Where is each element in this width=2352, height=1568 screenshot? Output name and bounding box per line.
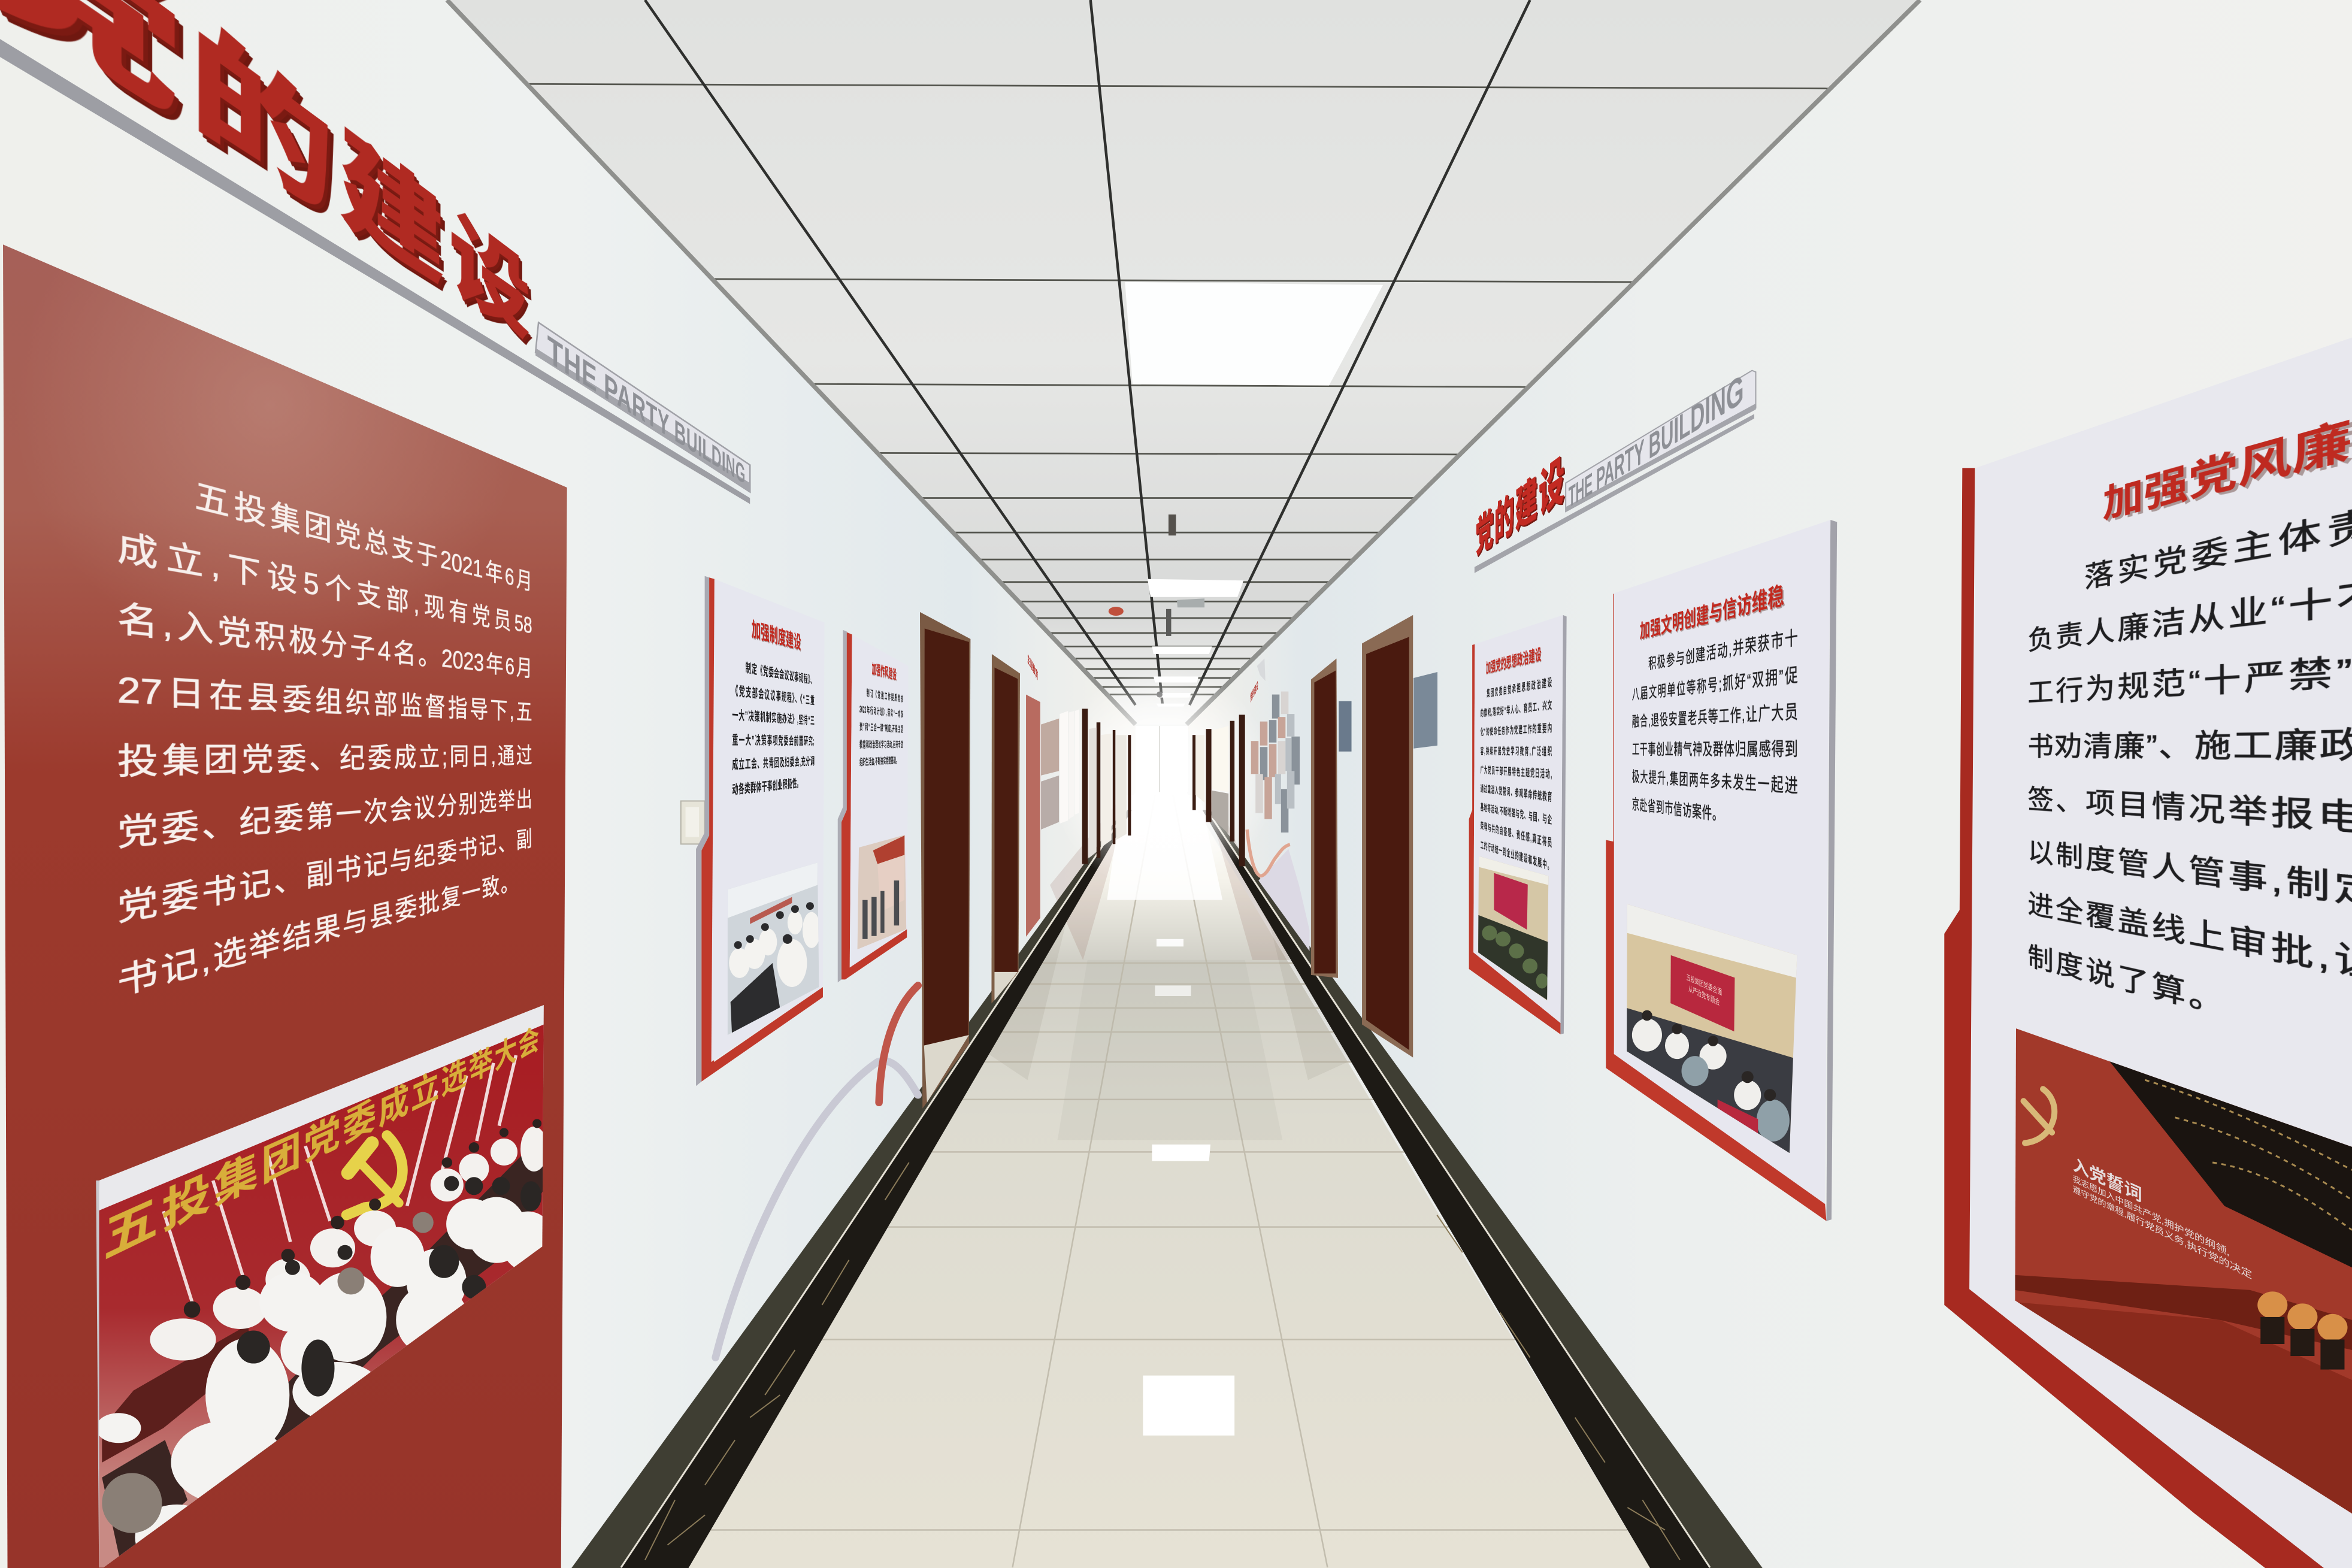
text block: political construction: 广大党员干部开展特色主题党日活动, bbox=[1481, 765, 1552, 780]
text block: civilization and petition: 工干事创业精气神及群体归属感得到 bbox=[1632, 738, 1798, 760]
text block: system building: 《党支部会议议事规程》、《“三重 bbox=[732, 683, 815, 706]
photo text: oath wall bbox=[2073, 1154, 2253, 1302]
text block: left red panel intro: 党委书记、副书记与纪委书记、副 bbox=[117, 825, 532, 928]
photo hammer and sickle bbox=[2024, 1089, 2054, 1143]
text block: political construction: 通过重温入党誓词、参观革命传统教育 bbox=[1481, 783, 1552, 803]
panel face bbox=[850, 634, 909, 967]
text block: political construction: 化”的使命任务作为党建工作的重要内 bbox=[1481, 722, 1552, 737]
text block: left red panel intro: 党委、纪委第一次会议分别选举出 bbox=[117, 786, 532, 853]
heading right: english plate: THE PARTY BUILDING bbox=[1569, 364, 1744, 514]
text block: political construction: 基地等活动,不断增强与党、与国、与企 bbox=[1481, 802, 1552, 826]
left panel photo: election meeting bbox=[90, 990, 555, 1568]
text block: political construction: 工的行动统一到企业的建设和发展中。 bbox=[1481, 840, 1552, 872]
panel face bbox=[1969, 338, 2352, 1568]
text block: system building: 制定《党委会会议议事规程》、 bbox=[746, 661, 815, 686]
baseboard right bbox=[1203, 810, 1763, 1568]
floor bbox=[689, 792, 1650, 1568]
text block: work style: 组织生活会,不断夯实党建基础。 bbox=[859, 755, 898, 767]
panel red frame bbox=[1469, 644, 1560, 1034]
text block: civilization and petition: 京赴省到市信访案件。 bbox=[1632, 796, 1723, 824]
left red panel bbox=[3, 244, 567, 1568]
heading left: english plate: THE PARTY BUILDING bbox=[547, 328, 746, 491]
strip under left heading bbox=[0, 39, 750, 504]
text block: system building: 重一大”决策事项党委会前置研究; bbox=[732, 732, 815, 747]
plate behind THE PARTY BUILDING left bbox=[535, 322, 750, 492]
text block: work style: 教育和政治理论学习活动,召开专题 bbox=[859, 739, 903, 749]
right wall bbox=[1186, 0, 2352, 1568]
panel title: political construction: 加强党的思想政治建设 bbox=[1486, 645, 1541, 676]
glow at corridor end bbox=[1050, 667, 1275, 892]
photo text: oath wall: 入党誓词 bbox=[2073, 1155, 2142, 1206]
baseboard left bbox=[571, 810, 1132, 1568]
photo text: oath wall: 我志愿加入中国共产党,拥护党的纲领, bbox=[2073, 1175, 2230, 1258]
small title far left: 主题教育 bbox=[1028, 652, 1038, 683]
text block: party conduct: 制度说了算。 bbox=[2028, 942, 2228, 1023]
panel photo bbox=[855, 833, 909, 952]
audience shirts bbox=[96, 1197, 555, 1568]
panel red frame bbox=[1944, 468, 2352, 1568]
panel: political construction bbox=[1469, 615, 1567, 1034]
text block: civilization and petition: 极大提升,集团两年多未发生一起进 bbox=[1632, 769, 1798, 797]
panel side edge bbox=[696, 576, 709, 1086]
ceiling light panel near bbox=[1125, 282, 1383, 386]
text block: system building: 动各类群体干事创业积极性。 bbox=[732, 776, 801, 797]
far doors right bbox=[1192, 715, 1245, 866]
text block: left red panel intro: 投集团党委、纪委成立;同日,通过 bbox=[117, 741, 532, 781]
text block: civilization and petition bbox=[1632, 620, 1798, 843]
light switch bbox=[681, 801, 705, 844]
text block: left red panel intro: 27日在县委组织部监督指导下,五 bbox=[117, 669, 532, 724]
panel side edge bbox=[1560, 615, 1567, 1034]
door left middle bbox=[991, 654, 1020, 1003]
door right middle bbox=[1311, 658, 1338, 978]
panel red frame bbox=[701, 577, 823, 1082]
panel: work style bbox=[838, 630, 909, 982]
panel face bbox=[1473, 615, 1563, 1023]
plaque small bbox=[1339, 701, 1352, 752]
plaque large bbox=[1413, 672, 1437, 749]
text block: civilization and petition: 八届文明单位等称号;抓好“双拥”促 bbox=[1632, 664, 1798, 703]
left wall bbox=[0, 0, 1136, 1568]
small title far right: 党的建设 bbox=[1250, 679, 1258, 704]
panel red frame bbox=[841, 632, 907, 979]
small right heading strip bbox=[1475, 414, 1754, 573]
floor reflections bbox=[982, 795, 1358, 1436]
text block: system building bbox=[732, 661, 815, 797]
text block: left red panel intro: 五投集团党总支于2021年6月 bbox=[195, 476, 532, 594]
ceiling fixtures bbox=[1109, 514, 1204, 698]
panel photo bbox=[1476, 852, 1551, 1002]
text block: work style: 2023年行动计划》,落实“一岗双 bbox=[859, 704, 903, 719]
far right wall details bbox=[1192, 658, 1437, 951]
flag poles bbox=[164, 1055, 516, 1306]
photo figures bbox=[2257, 1291, 2347, 1370]
panel red frame bbox=[1606, 592, 1826, 1221]
text block: left red panel intro bbox=[116, 476, 532, 1003]
text block: system building: 一大”决策机制实施办法》,坚持“三 bbox=[732, 707, 815, 727]
tables bbox=[102, 1324, 250, 1463]
panel: system building bbox=[696, 576, 824, 1086]
ceiling bbox=[447, 0, 1920, 725]
text block: civilization and petition: 积极参与创建活动,并荣获市十 bbox=[1648, 627, 1798, 673]
photo collage far right bbox=[1251, 692, 1300, 833]
photo ceiling bbox=[90, 990, 555, 1568]
text block: political construction: 荣辱与共的自豪感、责任感,真正将员 bbox=[1481, 821, 1552, 849]
wave mural far right bbox=[1258, 849, 1309, 951]
text block: political construction: 集团党委自觉承担思想政治建设 bbox=[1487, 676, 1552, 698]
text block: left red panel intro: 名,入党积极分子4名。2023年6月 bbox=[117, 598, 532, 680]
text block: civilization and petition: 融合,退役安置老兵等工作,让广大员 bbox=[1632, 701, 1798, 730]
panel side edge bbox=[1826, 520, 1837, 1221]
panel title: civilization and petition: 加强文明创建与信访维稳 bbox=[1640, 581, 1784, 642]
ceiling lights far bbox=[1148, 579, 1243, 707]
panel photo bbox=[728, 855, 821, 1043]
panel: party conduct bbox=[1944, 338, 2352, 1568]
far left wall details bbox=[1026, 652, 1131, 937]
heading right: party building: 党的建设 bbox=[1476, 448, 1566, 562]
text block: system building: 成立工会、共青团及妇委会,充分调 bbox=[732, 755, 815, 772]
hammer and sickle emblem bbox=[347, 1136, 402, 1215]
plate behind THE PARTY BUILDING right bbox=[1566, 371, 1755, 511]
far right boards bbox=[1195, 726, 1228, 834]
text block: left red panel intro: 成立,下设5个支部,现有党员58 bbox=[117, 526, 532, 637]
wall ornament far right bbox=[1257, 658, 1266, 681]
far doors left bbox=[1082, 709, 1131, 864]
text block: work style: 制订《党建工作提质增效 bbox=[867, 688, 903, 703]
photo caption banner: election meeting: 五投集团党委成立选举大会 bbox=[103, 1021, 540, 1269]
door right near bbox=[1362, 615, 1413, 1058]
text block: left red panel intro: 书记,选举结果与县委批复一致。 bbox=[116, 868, 517, 1003]
panel face bbox=[712, 579, 824, 1062]
door left near bbox=[920, 612, 970, 1109]
text block: work style: 责”和“三会一课”制度,开展主题 bbox=[859, 722, 903, 734]
far left picture boards bbox=[1041, 710, 1127, 858]
panel face bbox=[1614, 520, 1830, 1204]
banner bbox=[99, 1025, 544, 1568]
red display panel far left bbox=[1026, 695, 1040, 937]
text block: party conduct bbox=[2028, 371, 2352, 1227]
panel title: system building: 加强制度建设 bbox=[752, 618, 801, 653]
floor grout lines bbox=[710, 795, 1627, 1567]
presidium shirts and heads bbox=[150, 1127, 547, 1361]
panel side edge bbox=[838, 630, 847, 982]
photo banner text: meeting: 五投集团党委全面从严治党专题会 bbox=[1687, 973, 1722, 1007]
text block: political construction: 容,持续开展党史学习教育,广泛组织 bbox=[1481, 745, 1552, 757]
text block: political construction: 的旗帜,落实好“举人心、育员工、兴文 bbox=[1481, 699, 1552, 718]
text block: work style bbox=[859, 688, 903, 767]
audience heads bbox=[237, 1176, 541, 1397]
text block: political construction bbox=[1481, 676, 1552, 872]
panel photo bbox=[1623, 900, 1800, 1158]
curved wall decoration bbox=[716, 985, 918, 1358]
photo text: oath wall: 遵守党的章程,履行党员义务,执行党的决定 bbox=[2073, 1186, 2253, 1282]
panel title: work style: 加强作风建设 bbox=[872, 661, 897, 682]
panel: civilization and petition bbox=[1606, 520, 1837, 1221]
panel photo bbox=[2010, 1020, 2352, 1522]
